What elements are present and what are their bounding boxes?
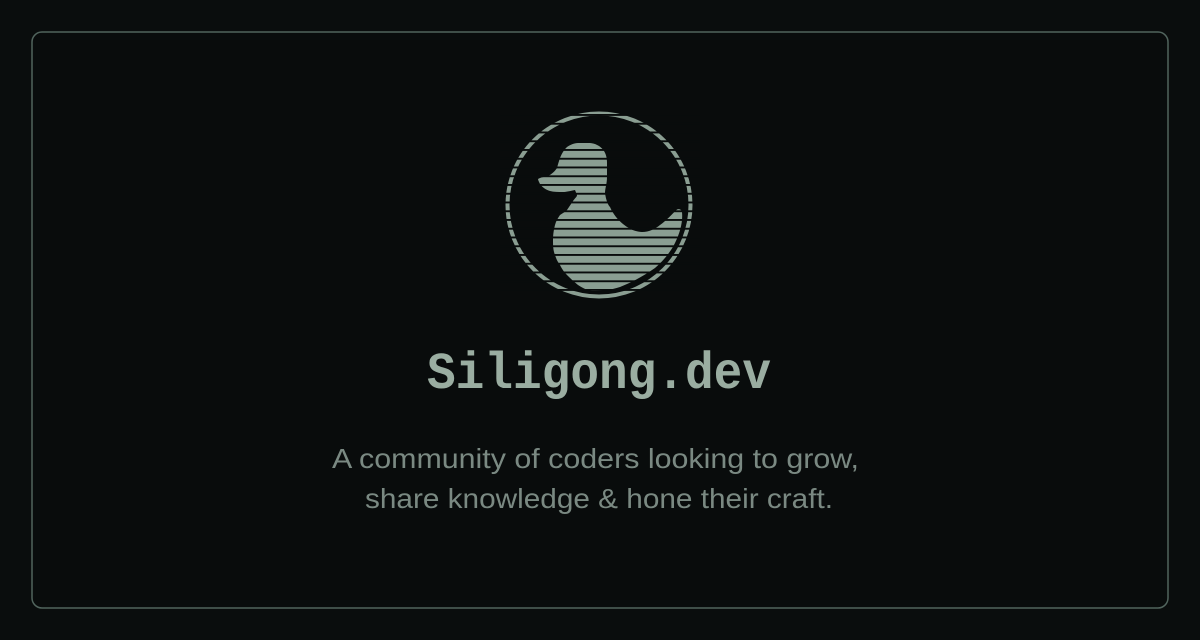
stripes overlay (500, 114, 700, 291)
tagline text: A community of coders looking to grow, (332, 443, 859, 474)
tagline text (332, 443, 859, 514)
title: Siligong.dev (427, 345, 771, 404)
icon: striped duck in circle logo (500, 114, 700, 296)
tagline text: share knowledge & hone their craft. (365, 483, 833, 514)
